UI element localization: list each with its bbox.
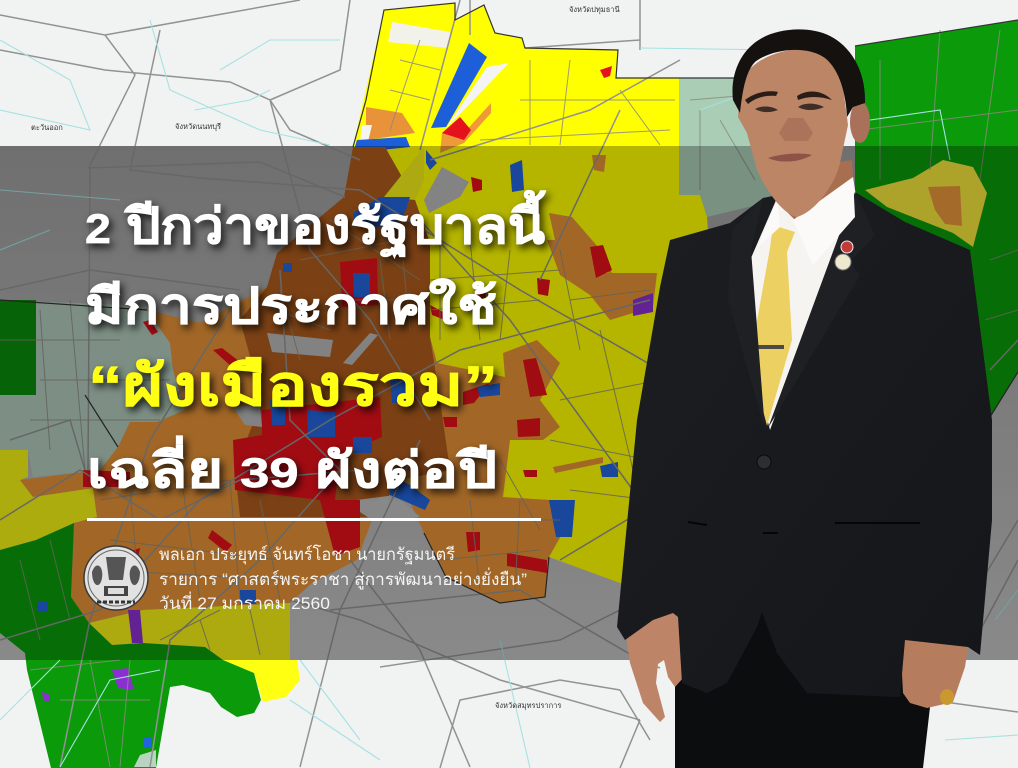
credit line 2: รายการ “ศาสตร์พระราชา สู่การพัฒนาอย่างยั่งยืน” (159, 567, 527, 590)
map: yellow strip (384, 147, 424, 200)
figure: right lapel (768, 192, 875, 428)
figure: jacket button (757, 455, 771, 469)
figure: right hand (900, 636, 968, 708)
map: south tip yellow (223, 660, 300, 702)
map: east green zone (855, 20, 1018, 425)
map: west yellow block (0, 450, 97, 550)
headline line 2: มีการประกาศใช้ (85, 278, 497, 334)
figure: mouth (768, 154, 812, 162)
map: white strip along airport (446, 63, 509, 128)
map: blue zone near junction (353, 137, 410, 153)
credit line 1: พลเอก ประยุทธ์ จันทร์โอชา นายกรัฐมนตรี (159, 544, 455, 565)
figure: face (738, 48, 848, 217)
map: north and east residential zone (353, 3, 720, 600)
map: grey patches (233, 333, 378, 427)
map: central dark brown zone (235, 147, 450, 520)
map: white block near junction (360, 125, 372, 142)
map: grey river loop (357, 495, 420, 520)
figure: hair (732, 29, 865, 117)
figure: trousers (675, 600, 930, 768)
figure: tie (750, 225, 795, 426)
map: dark boundary (0, 3, 1018, 603)
figure: shirt (751, 177, 856, 430)
white rule (87, 518, 541, 521)
map: east orange wedge upper (549, 213, 612, 273)
map: east town centre (928, 186, 962, 226)
map: orange strip (553, 457, 603, 473)
map: grey base under band (0, 146, 1018, 660)
map: white north block (388, 22, 450, 48)
map label: east: ตะวันออก (31, 123, 63, 132)
source credit text (159, 544, 527, 613)
map: orange spot north east (592, 155, 606, 172)
figure: left lapel (728, 198, 765, 430)
headline line 1: 2 ปีกว่าของรัฐบาลนี้ (85, 190, 546, 258)
map: hatched patch south (134, 750, 156, 767)
map: west hatched zone (0, 300, 185, 477)
map: red commercial patches (83, 66, 612, 573)
figure: man in dark suit (617, 29, 992, 768)
map: grey institutional block (424, 167, 469, 213)
map: central light orange zone (20, 147, 570, 623)
map: east town zone (865, 160, 987, 247)
figure: neck (764, 160, 853, 220)
figure: collar (758, 177, 855, 265)
figure: eyebrows (745, 91, 832, 104)
figure: pocket and seams (688, 522, 920, 533)
map: orange wedge (440, 103, 491, 153)
figure: tie clip (750, 345, 784, 349)
figure: eyes (755, 104, 824, 112)
map label: Nonthaburi: จังหวัดนนทบุรี (175, 122, 221, 131)
map: east orange zone (547, 240, 657, 320)
map: north orange zone (366, 107, 415, 140)
headline line 4: เฉลี่ย 39 ผังต่อปี (87, 435, 497, 498)
map: purple patches (42, 293, 653, 702)
map: north blue zone (431, 43, 487, 128)
figure: lapel pins (841, 241, 853, 253)
map: west green zone (0, 300, 36, 395)
figure: suit jacket (617, 180, 992, 697)
map: southern yellow zone (71, 597, 290, 660)
map: blue public patches (38, 150, 618, 748)
map label: Pathum Thani: จังหวัดปทุมธานี (569, 5, 620, 14)
headline (85, 190, 546, 498)
map: hatched rural zone north east (679, 78, 790, 217)
figure: left hand (625, 610, 684, 722)
figure: ear (850, 101, 870, 143)
credit line 3: วันที่ 27 มกราคม 2560 (159, 591, 330, 613)
map: south west green zone (0, 523, 261, 768)
map label: Samut Prakan: จังหวัดสมุทรปราการ (495, 701, 561, 710)
dark translucent band (0, 146, 1018, 660)
headline line 3, highlighted: “ผังเมืองรวม” (88, 354, 498, 417)
emblem: government seal (84, 546, 148, 610)
figure: nose (779, 118, 813, 141)
figure: ring (940, 689, 954, 705)
